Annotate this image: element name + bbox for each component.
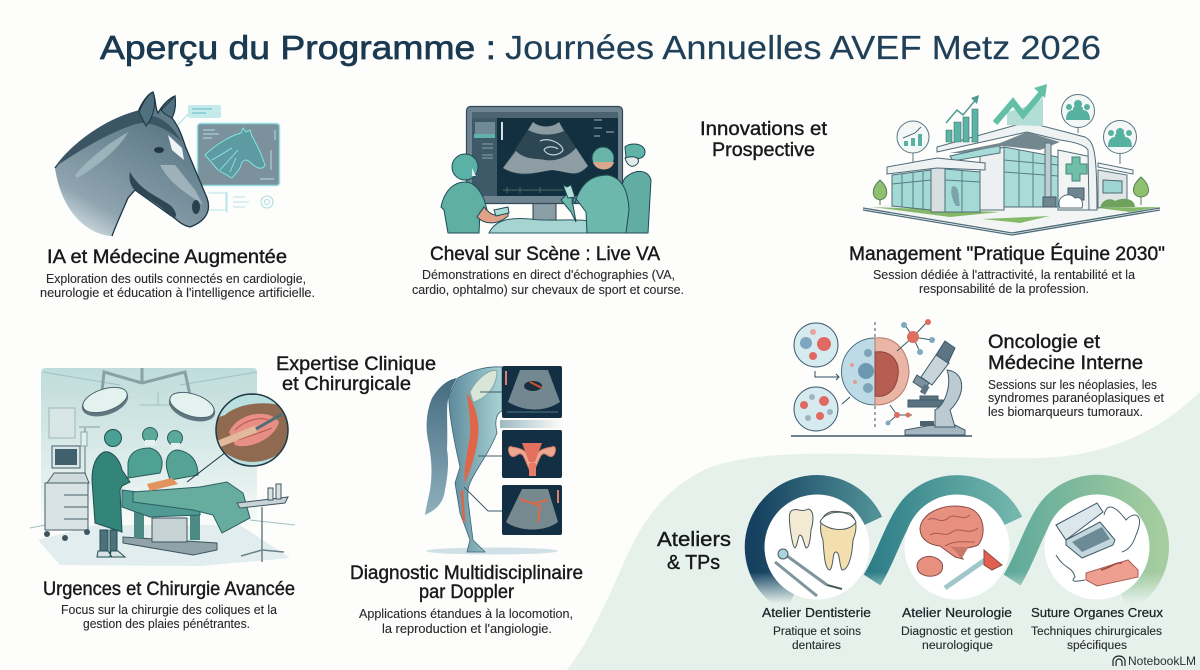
description: la reproduction et l'angiologie.: [382, 622, 552, 636]
labels: suture: spécifiques: [1067, 640, 1127, 652]
description: cardio, ophtalmo) sur chevaux de sport et course.: [412, 283, 684, 297]
description: gestion des plaies pénétrantes.: [83, 617, 250, 631]
description: les biomarqueurs tumoraux.: [988, 405, 1143, 419]
labels: dentistry: Atelier Dentisterie: [762, 605, 871, 620]
labels: suture: Techniques chirurgicales: [1031, 626, 1162, 638]
labels: suture: [1031, 605, 1163, 652]
heading: par Doppler: [419, 582, 515, 603]
panel: workshops ribbon: [735, 485, 1175, 652]
workshop: suture: [1044, 494, 1150, 600]
description: [412, 268, 684, 297]
title: Journées Annuelles AVEF Metz 2026: [505, 29, 1101, 66]
title: [100, 29, 1101, 66]
icon: ultrasound monitor and vets: [441, 106, 651, 233]
labels: dentistry: dentaires: [792, 640, 841, 652]
heading: Cheval sur Scène : Live VA: [430, 244, 660, 265]
section label: Ateliers & TPs: & TPs: [667, 552, 720, 574]
description: Exploration des outils connectés en cardiologie,: [46, 272, 306, 286]
icon: horse leg and doppler scans: [425, 366, 562, 554]
description: [988, 378, 1165, 419]
labels: neurology: [901, 605, 1013, 652]
description: responsabilité de la profession.: [919, 282, 1089, 296]
heading: Management "Pratique Équine 2030": [849, 244, 1165, 265]
labels: neurology: neurologique: [922, 640, 993, 652]
description: Démonstrations en direct d'échographies (VA,: [422, 268, 675, 282]
labels: neurology: Diagnostic et gestion: [901, 626, 1013, 638]
description: Session dédiée à l'attractivité, la rentabilité et la: [873, 268, 1135, 282]
labels: suture: Suture Organes Creux: [1031, 605, 1163, 620]
icon: AI horse screen: [177, 105, 280, 213]
description: Focus sur la chirurgie des coliques et la: [61, 603, 277, 617]
NotebookLM badge: NotebookLM: [1128, 654, 1196, 668]
heading: Urgences et Chirurgie Avancée: [43, 579, 295, 600]
description: neurologie et éducation à l'intelligence artificielle.: [40, 286, 315, 300]
description: syndromes paranéoplasiques et: [988, 391, 1165, 405]
description: [873, 268, 1135, 296]
ribbon: [735, 485, 1175, 614]
icon: cells and microscope: [791, 319, 972, 436]
heading: [988, 332, 1143, 374]
panel: Oncologie: [791, 319, 1165, 436]
panel: IA et Médecine Augmentée: [40, 92, 315, 300]
panel: Cheval sur Scène: [412, 106, 684, 297]
section label: Expertise Clinique et Chirurgicale: Expertise Clinique: [276, 354, 436, 375]
panel: Diagnostic Doppler: [350, 366, 583, 636]
heading: Oncologie et: [988, 332, 1101, 353]
panel: Urgences et Chirurgie: [30, 368, 295, 631]
icon: horse head: [55, 92, 208, 236]
description: Sessions sur les néoplasies, les: [988, 378, 1157, 392]
section label: Ateliers & TPs: [657, 529, 731, 574]
heading: Médecine Interne: [988, 353, 1143, 374]
description: [61, 603, 277, 631]
icon: operating room: [30, 368, 295, 566]
section label: Innovations et Prospective: [700, 119, 828, 161]
description: Applications étandues à la locomotion,: [359, 607, 573, 621]
title: Aperçu du Programme :: [100, 29, 496, 66]
section label: Innovations et Prospective: Prospective: [712, 140, 815, 161]
labels: dentistry: Pratique et soins: [773, 626, 861, 638]
workshop: dentistry: [764, 494, 870, 600]
section label: Expertise Clinique et Chirurgicale: et Chirurgicale: [282, 374, 411, 395]
labels: neurology: Atelier Neurologie: [902, 605, 1012, 620]
icon: veterinary clinic: [863, 84, 1160, 235]
heading: Diagnostic Multidisciplinaire: [350, 563, 583, 584]
heading: [350, 563, 583, 603]
background wave: [567, 392, 1200, 670]
section label: Expertise Clinique et Chirurgicale: [276, 354, 436, 395]
workshop: neurology: [904, 494, 1010, 600]
labels: dentistry: [762, 605, 871, 652]
panel: Management: [849, 84, 1165, 296]
description: [359, 607, 573, 636]
description: [40, 272, 315, 300]
section label: Ateliers & TPs: Ateliers: [657, 529, 731, 551]
section label: Innovations et Prospective: Innovations et: [700, 119, 828, 140]
heading: IA et Médecine Augmentée: [47, 247, 287, 268]
